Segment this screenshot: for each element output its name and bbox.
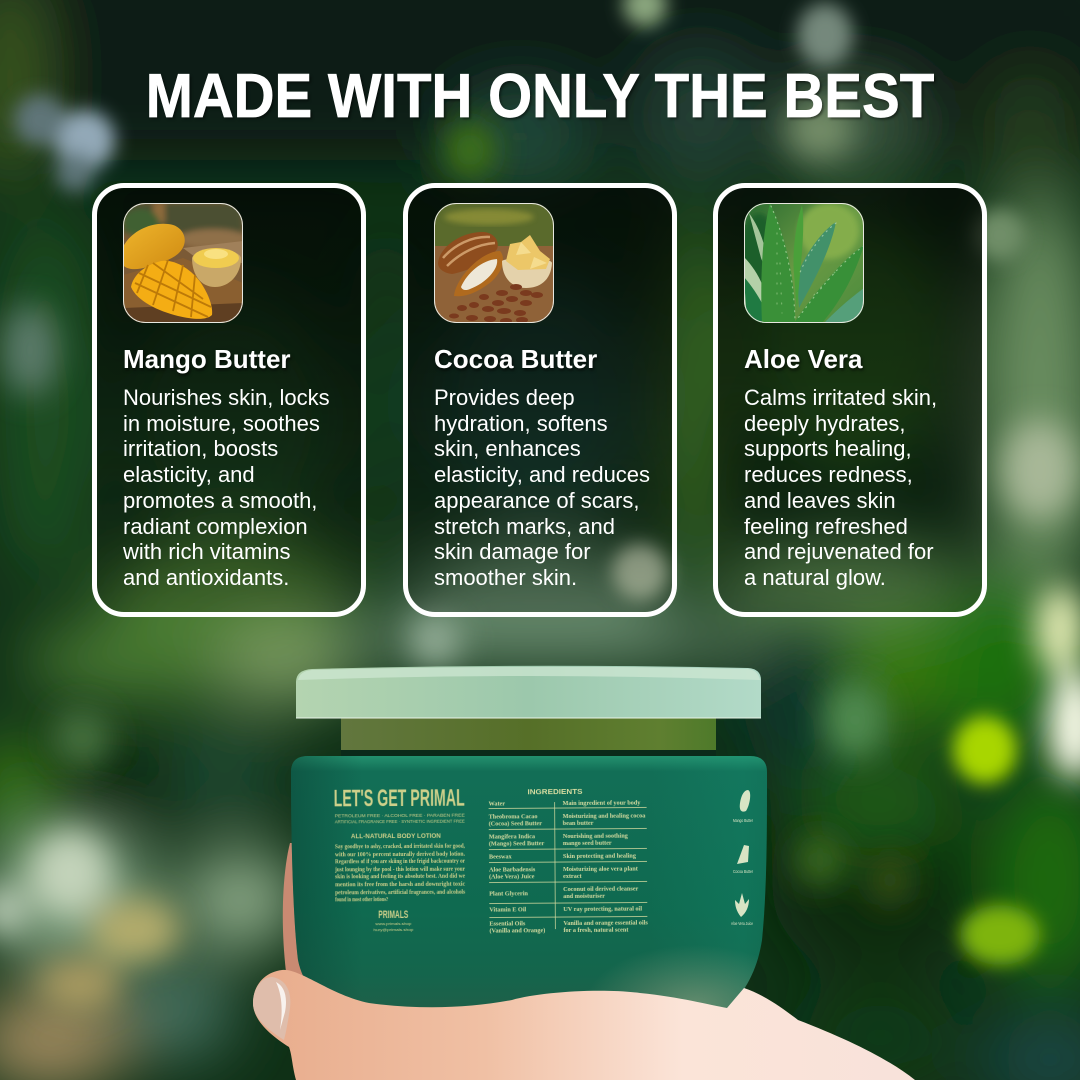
- jar label: ingredients table: and moisturiser: [563, 893, 605, 900]
- text block: supports healing,: [744, 436, 912, 461]
- jar label: left column: mention its free from the harsh and downright toxic: [335, 882, 466, 888]
- jar label: left column: ARTIFICIAL FRAGRANCE FREE · SYNTHETIC INGREDIENT FREE: [335, 819, 465, 824]
- jar label: left column: Say goodbye to ashy, cracked, and irritated skin for good,: [335, 844, 465, 850]
- jar label: left column: Regardless of if you are skiing in the frigid backcountry or: [335, 859, 465, 865]
- jar label: ingredient icons: [731, 790, 753, 926]
- icon: mango photo: [123, 203, 243, 323]
- text block: [123, 385, 330, 590]
- jar label: ingredients table: (Vanilla and Orange): [489, 927, 545, 935]
- jar label: ingredients table: Mangifera Indica: [489, 833, 535, 841]
- jar label: ingredient icons: Mango Butter: [733, 818, 753, 823]
- panel: cocoa butter: [403, 183, 677, 617]
- jar label: ingredient icons: Aloe Vera Juice: [731, 921, 753, 926]
- jar label: ingredients table: bean butter: [563, 820, 594, 827]
- jar label: ingredients table: mango seed butter: [563, 840, 612, 847]
- text block: skin damage for: [434, 539, 591, 564]
- jar label: ingredients table: extract: [563, 873, 583, 880]
- jar label: ingredients table: (Aloe Vera) Juice: [489, 873, 535, 881]
- heading: Cocoa Butter: [434, 344, 597, 374]
- thumbnail: [253, 977, 290, 1040]
- jar label: ingredients table: Beeswax: [489, 853, 513, 861]
- text block: with rich vitamins: [123, 539, 290, 564]
- jar label: ingredients table: Water: [489, 800, 505, 808]
- text block: Nourishes skin, locks: [123, 385, 330, 410]
- text block: irritation, boosts: [123, 436, 278, 461]
- jar label: ingredients table: Main ingredient of your body: [563, 799, 641, 807]
- text block: stretch marks, and: [434, 514, 615, 539]
- jar label: ingredients table: Aloe Barbadensis: [489, 866, 536, 874]
- panel: aloe vera: [713, 183, 987, 617]
- text block: Calms irritated skin,: [744, 385, 937, 410]
- text block: a natural glow.: [744, 565, 886, 590]
- text block: Provides deep: [434, 385, 575, 410]
- jar label: ingredients table: Moisturizing aloe vera plant: [563, 866, 639, 873]
- jar label: ingredient icons: Cocoa Butter: [733, 869, 753, 874]
- text block: [434, 385, 650, 590]
- jar label: ingredients table: Essential Oils: [489, 920, 526, 928]
- finger behind jar: [283, 843, 305, 980]
- text block: elasticity, and reduces: [434, 462, 650, 487]
- heading: Mango Butter: [123, 344, 291, 374]
- text block: in moisture, soothes: [123, 411, 320, 436]
- text block: deeply hydrates,: [744, 411, 905, 436]
- jar label: ingredients table: Skin protecting and healing: [563, 853, 637, 860]
- text block: reduces redness,: [744, 462, 913, 487]
- text block: skin, enhances: [434, 436, 581, 461]
- jar label: left column: LET'S GET PRIMAL: [334, 785, 465, 812]
- jar label: left column: www.primals.shop: [375, 922, 411, 926]
- jar label: ingredients table: UV ray protecting, natural oil: [563, 905, 642, 913]
- jar label: ingredients table: (Cocoa) Seed Butter: [489, 820, 542, 828]
- jar label: left column: just lounging by the pool - this lotion will make sure your: [334, 867, 465, 873]
- jar label: ingredients table: Coconut oil derived cleanser: [563, 886, 639, 893]
- icon: aloe photo: [744, 203, 864, 323]
- jar label: left column: ALL-NATURAL BODY LOTION: [351, 833, 441, 840]
- text block: and rejuvenated for: [744, 539, 934, 564]
- title: MADE WITH ONLY THE BEST: [146, 62, 934, 131]
- text block: appearance of scars,: [434, 488, 639, 513]
- jar neck: [341, 718, 716, 756]
- jar label: ingredients table: for a fresh, natural scent: [563, 927, 629, 934]
- text block: and antioxidants.: [123, 565, 289, 590]
- jar label: ingredients table: (Mango) Seed Butter: [489, 840, 544, 848]
- jar label: ingredients table: Nourishing and soothing: [563, 833, 629, 840]
- jar label: ingredients table: Theobroma Cacao: [489, 813, 538, 821]
- jar label: left column: petroleum derivatives, artificial fragrances, and alcohols: [335, 890, 466, 896]
- jar label: left column: PETROLEUM FREE · ALCOHOL FREE · PARABEN FREE: [335, 813, 465, 818]
- jar label: ingredients table: [488, 788, 648, 935]
- jar label: ingredients table: INGREDIENTS: [527, 789, 583, 796]
- jar label: ingredients table: Vanilla and orange essential oils: [563, 919, 648, 927]
- text block: elasticity, and: [123, 462, 255, 487]
- text block: hydration, softens: [434, 411, 608, 436]
- jar label: left column: skin is looking and feeling its absolute best. And did we: [335, 874, 466, 880]
- jar label: left column: [334, 785, 466, 932]
- text block: radiant complexion: [123, 514, 308, 539]
- text block: [744, 385, 937, 590]
- jar label: left column: with our 100% percent naturally derived body lotion.: [335, 852, 466, 858]
- jar label: ingredients table: Moisturizing and healing cocoa: [563, 812, 645, 820]
- jar label: left column: found in most other lotions?: [335, 897, 388, 903]
- text block: smoother skin.: [434, 565, 577, 590]
- text block: feeling refreshed: [744, 514, 908, 539]
- text block: and leaves skin: [744, 488, 896, 513]
- jar lid: [296, 666, 761, 718]
- text block: promotes a smooth,: [123, 488, 317, 513]
- jar label: left column: PRIMALS: [378, 909, 408, 921]
- jar label: ingredients table: Plant Glycerin: [489, 890, 528, 898]
- icon: cocoa photo: [434, 203, 554, 323]
- jar label: ingredients table: Vitamin E Oil: [489, 906, 527, 914]
- panel: mango butter: [92, 183, 366, 617]
- heading: Aloe Vera: [744, 344, 863, 374]
- product jar held in hand: [253, 666, 915, 1080]
- hand: [253, 970, 915, 1080]
- jar body: [291, 756, 767, 1008]
- jar label: left column: hury@primals.shop: [373, 928, 413, 932]
